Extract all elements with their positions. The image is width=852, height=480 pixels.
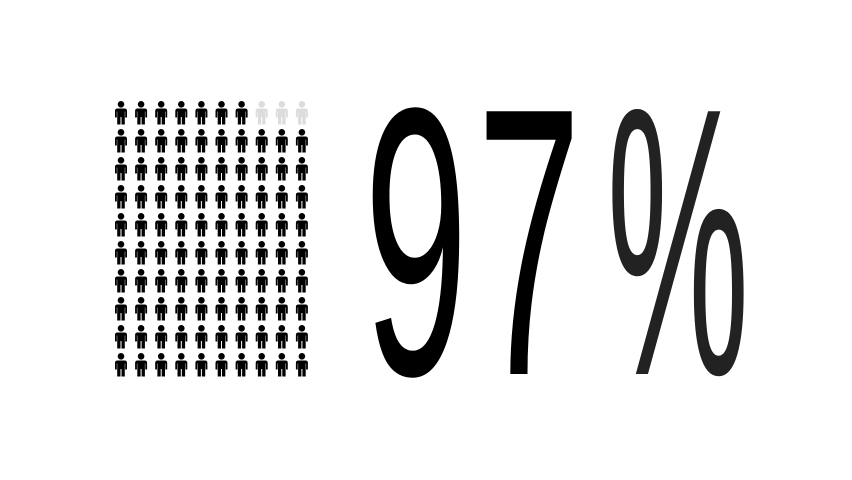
big percentage text <box>364 29 749 456</box>
pictogram grid: 97 of 100 people <box>115 101 308 376</box>
big percentage text: 9 <box>364 29 468 455</box>
big percentage text: 7 <box>477 29 581 455</box>
rows 2-10 <box>115 129 308 376</box>
row 1 (3 grey) <box>115 101 248 124</box>
big percentage text: % <box>607 30 749 456</box>
